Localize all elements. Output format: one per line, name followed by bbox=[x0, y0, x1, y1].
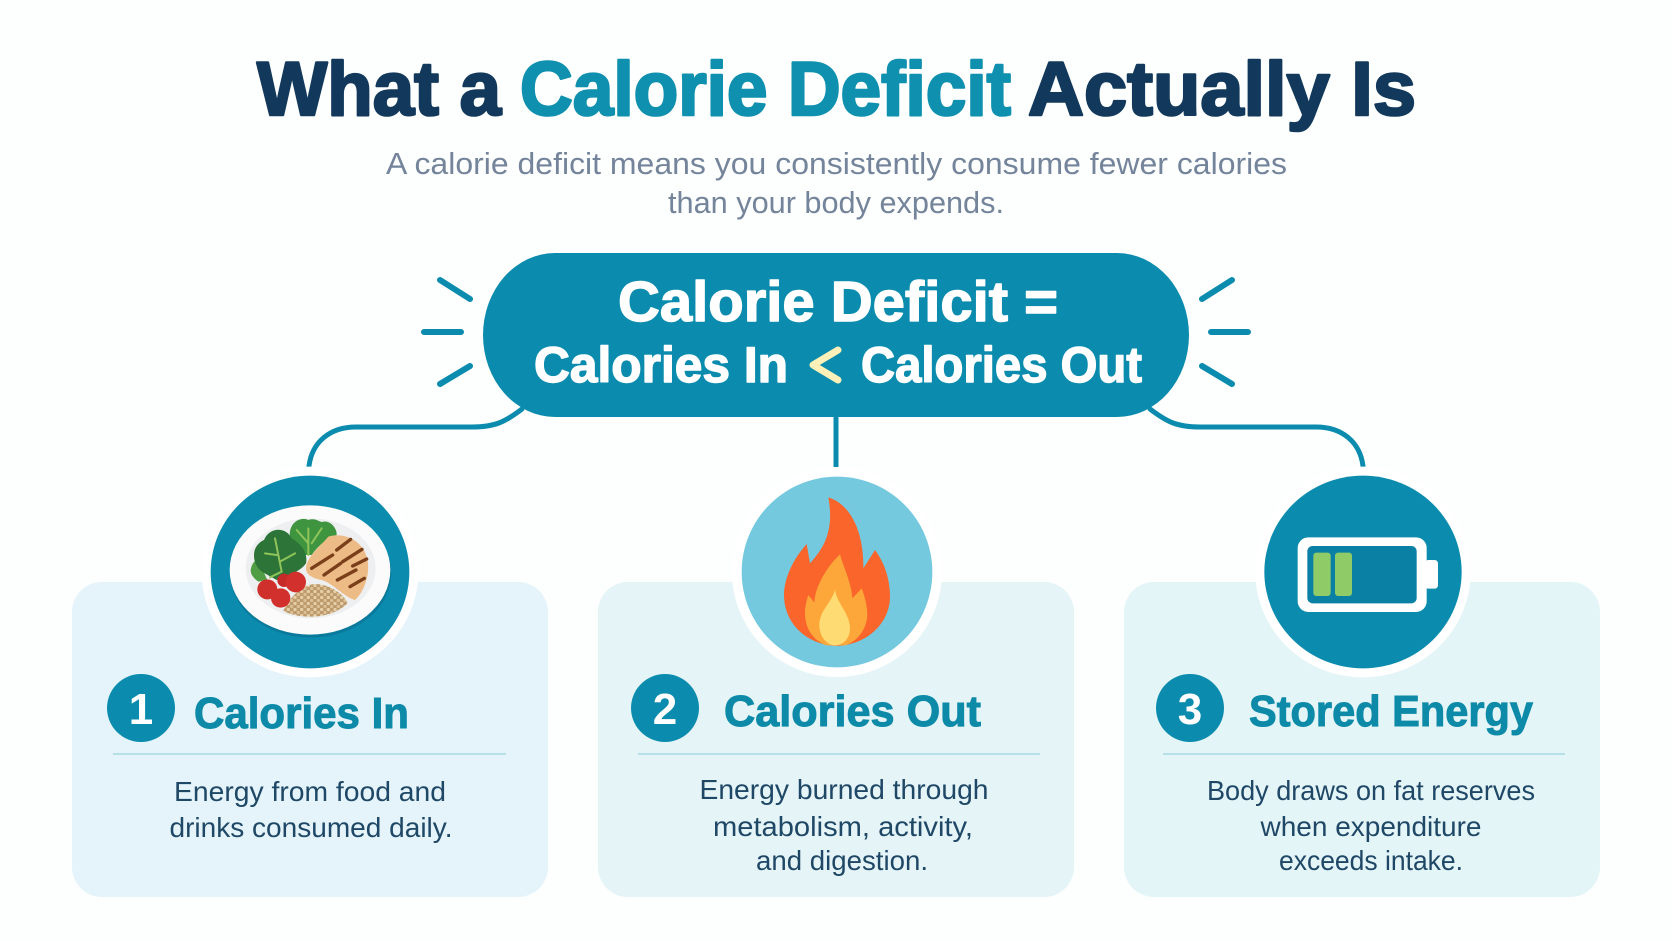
body text 1: Energy from food and bbox=[174, 776, 446, 807]
icon: low battery bbox=[1255, 467, 1471, 677]
panel: calories in bbox=[72, 582, 548, 897]
rays right bbox=[1202, 280, 1248, 384]
less-than sign bbox=[813, 350, 838, 380]
title: What a bbox=[257, 47, 502, 132]
subtitle: A calorie deficit means you consistently consume fewer calories bbox=[386, 146, 1287, 181]
number badge 2: 2 bbox=[653, 685, 677, 734]
body text 2: Energy burned through bbox=[700, 774, 988, 805]
body text 1 bbox=[170, 776, 452, 843]
body text 2 bbox=[700, 774, 988, 876]
subtitle: than your body expends. bbox=[668, 185, 1004, 220]
icon: flame bbox=[732, 467, 942, 677]
title: Calorie Deficit bbox=[520, 47, 1011, 132]
panel: stored energy bbox=[1124, 582, 1600, 897]
body text 3 bbox=[1207, 775, 1535, 876]
formula text: Calories Out bbox=[861, 337, 1142, 393]
body text 2: metabolism, activity, bbox=[713, 811, 973, 842]
connector lines bbox=[309, 409, 1363, 466]
formula text: Calorie Deficit = bbox=[618, 270, 1058, 334]
icon: plate of food bbox=[202, 467, 418, 677]
body text 3: Body draws on fat reserves bbox=[1207, 775, 1535, 806]
number badge 3 bbox=[1156, 674, 1224, 742]
subtitle bbox=[386, 146, 1287, 220]
formula pill bbox=[483, 253, 1189, 417]
heading: stored energy: Stored Energy bbox=[1249, 687, 1533, 736]
title bbox=[257, 47, 1416, 132]
heading: calories out: Calories Out bbox=[724, 687, 981, 736]
heading: calories in: Calories In bbox=[194, 689, 409, 738]
number badge 1: 1 bbox=[129, 685, 153, 734]
rays left bbox=[424, 280, 470, 384]
formula text bbox=[534, 270, 1142, 393]
formula text: Calories In bbox=[534, 337, 788, 393]
body text 3: when expenditure bbox=[1260, 811, 1482, 842]
body text 3: exceeds intake. bbox=[1279, 845, 1463, 876]
body text 2: and digestion. bbox=[756, 845, 928, 876]
number badge 2 bbox=[631, 674, 699, 742]
number badge 3: 3 bbox=[1178, 685, 1202, 734]
panel: calories out bbox=[598, 582, 1074, 897]
number badge 1 bbox=[107, 674, 175, 742]
body text 1: drinks consumed daily. bbox=[170, 812, 452, 843]
title: Actually Is bbox=[1028, 47, 1416, 132]
